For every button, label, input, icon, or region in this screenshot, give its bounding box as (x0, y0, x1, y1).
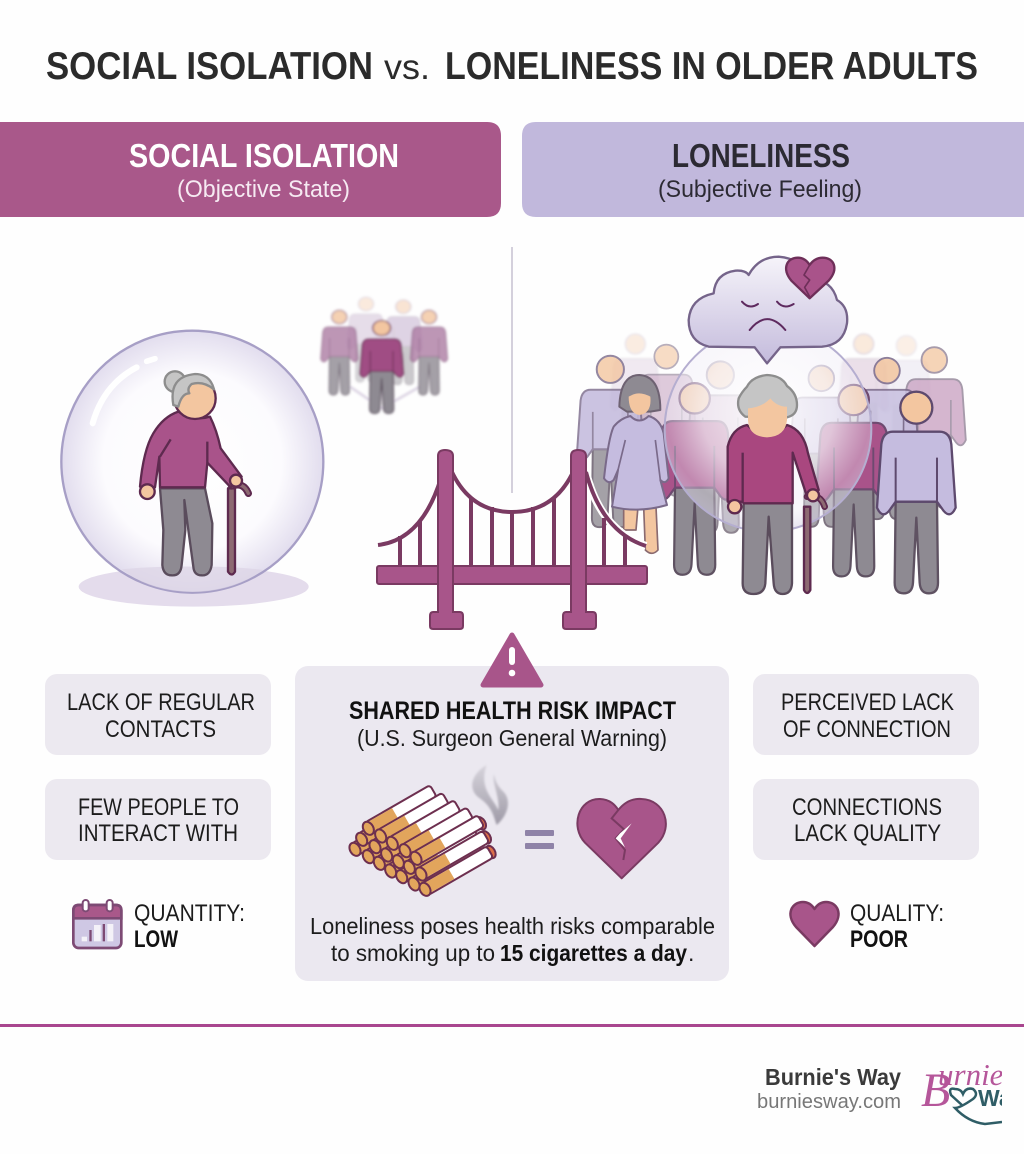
body text: Loneliness poses health risks comparable (310, 913, 715, 939)
older woman figure (140, 371, 248, 575)
cigarette bodies (352, 785, 493, 895)
hands (728, 500, 741, 513)
ground shadow (79, 567, 309, 607)
box: connections lack quality: LACK QUALITY (794, 820, 941, 847)
header: social isolation (0, 122, 501, 217)
box: connections lack quality (753, 779, 979, 860)
logo: urnie (938, 1057, 1004, 1092)
footer brand text (757, 1064, 901, 1113)
sweater (140, 412, 242, 487)
footer brand text: Burnie's Way (765, 1064, 901, 1090)
cane (228, 485, 248, 574)
hands (140, 484, 155, 499)
header: loneliness: LONELINESS (672, 137, 850, 174)
box: perceived lack of connection: OF CONNECTION (783, 716, 951, 743)
cable halo (586, 472, 646, 546)
illustration: isolated older adult in bubble (61, 331, 323, 607)
illustration: older adult lonely in a crowd (577, 257, 966, 594)
panel: shared health risk impact (295, 635, 729, 981)
trousers (743, 503, 792, 594)
icon: heart (790, 902, 839, 946)
trousers (160, 488, 212, 575)
body text (310, 913, 715, 966)
label: quality poor (850, 900, 944, 953)
header: social isolation: SOCIAL ISOLATION (129, 137, 399, 174)
label: quality poor: POOR (850, 926, 908, 953)
bridge (377, 450, 647, 629)
glass bubble (61, 331, 323, 593)
bubble highlights (93, 359, 155, 423)
label: quality poor: QUALITY: (850, 900, 944, 927)
header: loneliness: (Subjective Feeling) (658, 176, 862, 203)
central older woman (728, 375, 825, 594)
front man (877, 392, 956, 593)
box: connections lack quality: CONNECTIONS (792, 794, 942, 821)
ground shadow inside bubble (122, 567, 263, 592)
equals sign (525, 830, 554, 849)
face (748, 398, 787, 437)
box: few people to interact with: INTERACT WITH (78, 820, 238, 847)
label: quantity low: QUANTITY: (134, 900, 245, 927)
icon: calendar with falling bars (73, 900, 121, 948)
woman in dress (604, 375, 669, 553)
label: quantity low: LOW (134, 926, 178, 953)
title: vs. (384, 48, 430, 87)
background crowd (577, 334, 966, 576)
body text: 15 cigarettes a day (500, 940, 687, 966)
body text: to smoking up to (331, 940, 495, 966)
cane (804, 496, 825, 593)
box: lack of regular contacts: LACK OF REGULAR (67, 689, 255, 716)
smoke (472, 765, 508, 825)
footer brand text: burniesway.com (757, 1091, 901, 1113)
icon: broken heart (577, 799, 666, 878)
box: perceived lack of connection (753, 674, 979, 755)
head (174, 378, 216, 419)
box: few people to interact with (45, 779, 271, 860)
icon: bundle of cigarettes (347, 765, 508, 898)
translucent bubble (665, 326, 871, 532)
hair bun (165, 371, 185, 392)
box: lack of regular contacts: CONTACTS (105, 716, 216, 743)
title: SOCIAL ISOLATION (46, 45, 373, 88)
sad cloud (689, 257, 847, 363)
cigarette ends (347, 820, 433, 898)
logo (922, 1065, 1002, 1126)
logo: B (921, 1064, 950, 1117)
body text: . (688, 940, 694, 966)
hair (173, 374, 214, 407)
header: social isolation: (Objective State) (177, 176, 350, 203)
box: lack of regular contacts (45, 674, 271, 755)
icon: warning triangle (483, 635, 541, 685)
label: quantity low (134, 900, 245, 953)
box: few people to interact with: FEW PEOPLE TO (78, 794, 239, 821)
heading: SHARED HEALTH RISK IMPACT (349, 697, 676, 725)
title (46, 45, 978, 88)
logo: Way (978, 1085, 1024, 1111)
header: loneliness (522, 122, 1024, 217)
illustration: blurred distant group (321, 297, 447, 413)
box: perceived lack of connection: PERCEIVED LACK (781, 689, 954, 716)
cigarette tips (474, 815, 498, 860)
hair (738, 375, 797, 417)
subheading: (U.S. Surgeon General Warning) (357, 725, 667, 751)
small broken heart (786, 258, 834, 298)
sweater (728, 425, 819, 503)
